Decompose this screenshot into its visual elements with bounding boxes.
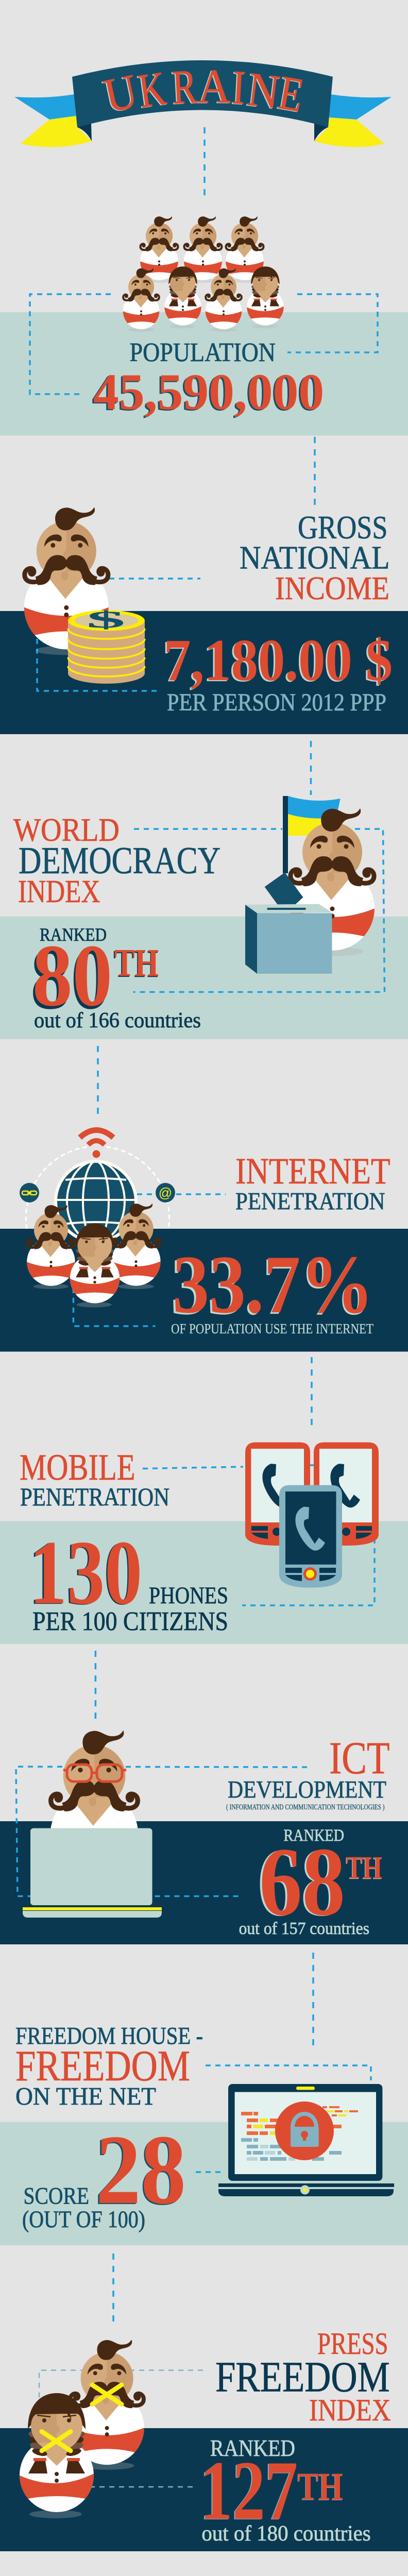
heading: freedom house freedom on the net — [15, 2023, 203, 2110]
label: score: SCORE — [24, 2182, 89, 2209]
title text: K — [134, 62, 168, 119]
icon: dollar sign: $ — [87, 606, 125, 633]
heading: mobile penetration: MOBILE — [20, 1447, 135, 1488]
icon: link — [20, 1183, 39, 1202]
heading: internet penetration: PENETRATION — [235, 1188, 385, 1215]
connector: to freedom on the net — [312, 1953, 314, 2046]
connector: mobile lower — [242, 1538, 375, 1605]
number: rank 127th: TH — [298, 2465, 343, 2508]
icon: right phone — [314, 1443, 379, 1546]
icon: gagged man — [66, 2340, 148, 2470]
number: rank 80th — [30, 927, 159, 1028]
connector: press upper — [39, 2370, 203, 2398]
number: rank 80th: TH — [113, 942, 158, 986]
icon: gag — [42, 2432, 71, 2451]
number: rank 68th: TH — [346, 1851, 382, 1886]
title text: I — [230, 61, 246, 115]
heading: world democracy index: INDEX — [18, 874, 100, 909]
number: rank 80th: 80 — [30, 930, 111, 1028]
connector: to mobile — [311, 1357, 313, 1429]
title text: R — [170, 61, 197, 115]
panel: freedom on the net band — [0, 2122, 408, 2245]
heading: population: POPULATION — [130, 338, 276, 367]
caption: phones per 100 citizens — [32, 1582, 228, 1636]
heading: press freedom index — [215, 2327, 391, 2427]
icon: glasses — [63, 1765, 126, 1782]
number: rank 68th: TH — [346, 1851, 382, 1886]
panel: democracy band — [0, 917, 408, 1039]
number: 33.7%: 33.7% — [173, 1239, 373, 1330]
number: population: 45,590,000 — [93, 363, 324, 420]
title text: A — [198, 60, 231, 113]
caption: out of 157: out of 157 countries — [239, 1919, 369, 1938]
heading: mobile penetration — [20, 1447, 169, 1511]
connector: internet right — [137, 1193, 226, 1195]
number: rank 127th: 127 — [200, 2444, 298, 2537]
label: ranked: RANKED — [210, 2435, 295, 2461]
number: 33.7%: 33.7% — [171, 1240, 372, 1332]
connector: population left — [30, 294, 111, 394]
connector: democracy upper — [134, 828, 282, 830]
connector: to ICT — [95, 1651, 96, 1721]
title text — [98, 60, 308, 124]
caption: out of 166: out of 166 countries — [34, 1009, 201, 1032]
icon: computer — [218, 2084, 394, 2196]
heading: gross national income: NATIONAL — [240, 539, 389, 576]
connector: net lower — [196, 2171, 225, 2173]
heading: ICT development: DEVELOPMENT — [228, 1776, 386, 1803]
title text: R — [171, 60, 198, 115]
title text: A — [197, 60, 230, 114]
icon: ballot box — [245, 872, 332, 974]
icon: gagged woman — [15, 2393, 98, 2518]
icon: coin stack — [68, 606, 145, 684]
connector: income upper — [109, 578, 200, 580]
connector: democracy right — [133, 829, 384, 992]
connector: press lower — [90, 2486, 193, 2487]
heading: freedom house freedom on the net: FREEDOM — [15, 2042, 190, 2090]
icon: padlock — [275, 2102, 334, 2160]
icon: left phone — [245, 1443, 310, 1546]
icon: voter — [286, 808, 379, 956]
icon: at sign — [156, 1183, 175, 1202]
connector: banner to population — [203, 127, 206, 200]
title text: E — [274, 66, 307, 123]
icon: group of people — [121, 216, 286, 332]
heading: internet penetration — [235, 1150, 390, 1215]
icon: center phone — [279, 1485, 342, 1588]
title text: N — [244, 63, 281, 120]
title text: U — [99, 64, 142, 123]
connector: net upper — [206, 2065, 371, 2080]
connector: population right — [287, 294, 378, 352]
connector: to democracy — [310, 741, 312, 795]
number: income: 7,180.00 $ — [162, 629, 391, 694]
number: 130: 130 — [29, 1521, 142, 1623]
panel: income band — [0, 611, 408, 734]
heading: freedom house freedom on the net: ON THE NET — [15, 2082, 156, 2110]
connector: mobile upper — [143, 1467, 243, 1468]
label: ranked: RANKED — [40, 924, 107, 945]
heading: gross national income: GROSS — [298, 509, 387, 546]
icon: laptop — [23, 1828, 162, 1918]
connector: income lower — [37, 639, 158, 691]
panel: internet band — [0, 1229, 408, 1352]
number: rank 127th: 127 — [199, 2445, 297, 2538]
caption: out of 180: out of 180 countries — [201, 2522, 371, 2546]
heading: mobile penetration: PENETRATION — [20, 1482, 169, 1511]
title text: I — [231, 61, 247, 115]
heading: press freedom index: INDEX — [309, 2393, 391, 2427]
number: 130: 130 — [28, 1522, 141, 1624]
panel: mobile band — [0, 1521, 408, 1644]
title text: K — [135, 62, 169, 118]
number: 28: 28 — [94, 2115, 185, 2226]
heading: ICT development — [226, 1733, 390, 1811]
caption: of population: OF POPULATION USE THE INTERNET — [171, 1321, 373, 1336]
icon: flag — [283, 796, 341, 873]
label: score — [22, 2182, 145, 2233]
number: rank 68th: 68 — [259, 1828, 345, 1936]
title text: U — [98, 64, 141, 124]
title banner — [14, 60, 392, 147]
title text: E — [275, 65, 308, 123]
connector: to press freedom — [112, 2253, 114, 2325]
heading: world democracy index: WORLD — [13, 811, 120, 848]
icon: gag — [92, 2385, 122, 2404]
number: population: 45,590,000 — [92, 364, 322, 421]
caption: phones per 100 citizens: PHONES — [149, 1582, 228, 1609]
connector: to internet — [97, 1046, 99, 1119]
label: score: (OUT OF 100) — [22, 2206, 145, 2233]
icon: at sign: @ — [159, 1185, 172, 1200]
number: rank 127th: TH — [297, 2466, 343, 2509]
heading: world democracy index: DEMOCRACY — [19, 840, 220, 882]
heading: press freedom index: PRESS — [317, 2327, 388, 2361]
icon: man with glasses — [46, 1731, 143, 1884]
number: rank 80th: 80 — [32, 927, 112, 1025]
title text: N — [245, 62, 282, 120]
heading: world democracy index — [13, 811, 220, 909]
connector: internet lower — [73, 1288, 156, 1326]
connector: ICT loop — [16, 1767, 307, 1896]
number: rank 80th: TH — [114, 941, 159, 985]
icon: man — [20, 507, 113, 655]
number: 28: 28 — [96, 2114, 186, 2225]
panel: population band — [0, 312, 408, 436]
heading: gross national income — [240, 509, 389, 606]
connector: to income — [314, 437, 316, 509]
decorative network arc — [26, 1147, 169, 1229]
connector: between phones — [310, 1464, 314, 1466]
code blocks — [241, 2106, 358, 2135]
heading: freedom house freedom on the net: FREEDOM HOUSE - — [15, 2023, 203, 2050]
icon: internet users — [25, 1204, 163, 1308]
icon: wifi — [80, 1130, 113, 1158]
panel: ICT band — [0, 1821, 408, 1944]
heading: gross national income: INCOME — [275, 570, 389, 606]
panel: press freedom band — [0, 2428, 408, 2551]
number: rank 68th: 68 — [257, 1828, 344, 1937]
icon: globe — [56, 1161, 136, 1242]
heading: ICT development: ICT — [329, 1733, 390, 1784]
caption: phones per 100 citizens: PER 100 CITIZENS — [32, 1607, 228, 1636]
label: ranked: RANKED — [283, 1826, 344, 1845]
